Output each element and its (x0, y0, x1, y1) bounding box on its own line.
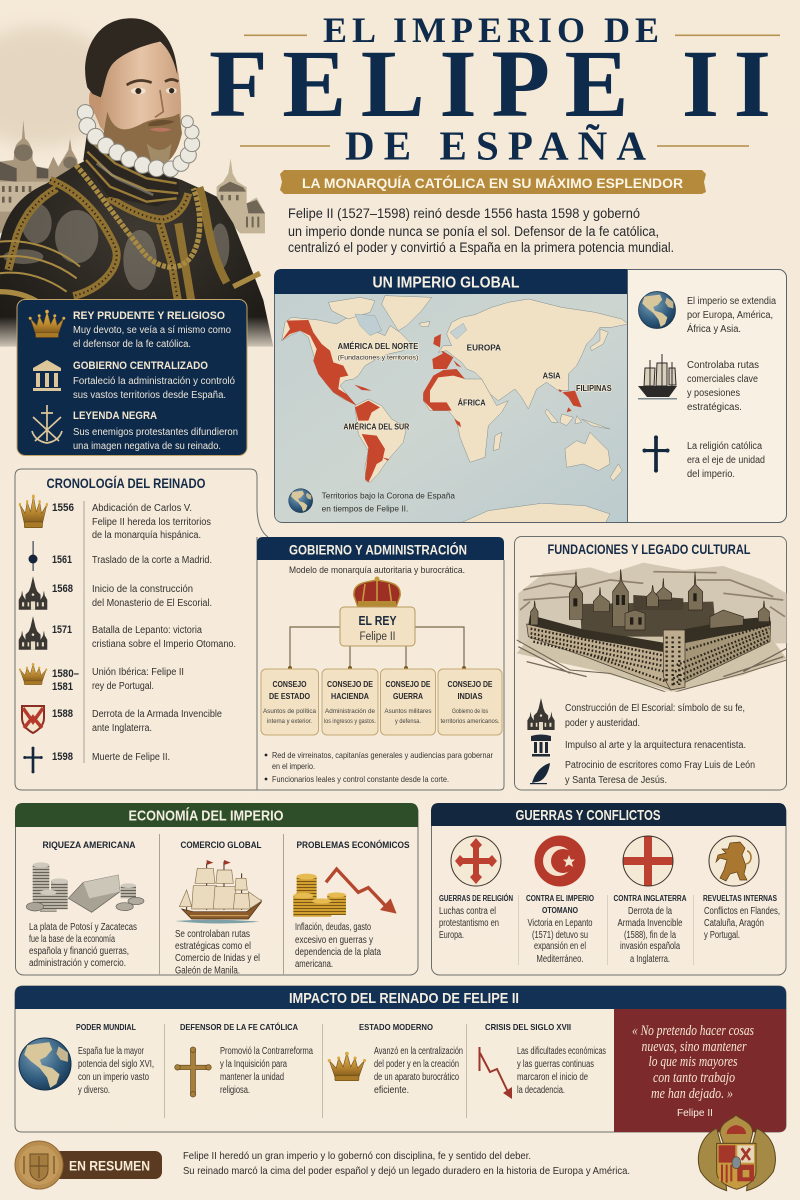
panel: cronologia del reinado: Muerte de Felipe II. (92, 752, 170, 763)
icon: column (531, 734, 551, 756)
column: riqueza americana: fue la base de la economía (29, 934, 115, 945)
column: defensor de la fe: y la Inquisición para (220, 1059, 287, 1070)
column: contra el imperio otomano: Victoria en Lepanto (528, 918, 593, 929)
subtitle ribbon: LA MONARQUÍA CATÓLICA EN SU MÁXIMO ESPLENDOR (302, 174, 683, 191)
illustration: el escorial engraving (517, 563, 787, 693)
illustration: galleon (175, 860, 262, 923)
box: consejo de indias: Gobierno de los (452, 708, 488, 715)
column: contra inglaterra (614, 894, 687, 965)
icon: shield (22, 706, 44, 733)
column: contra inglaterra: a Inglaterra. (630, 954, 670, 965)
panel: cronologia del reinado: 1580– (52, 668, 79, 680)
panel: cronologia del reinado: cristiana sobre el Imperio Otomano. (92, 639, 236, 650)
box: consejo de indias (438, 669, 502, 735)
world map (275, 294, 628, 524)
en resumen badge: EN RESUMEN (69, 1158, 150, 1174)
column: crisis del siglo xvii: la decadencia. (517, 1085, 565, 1096)
panel: rey prudente: Sus enemigos protestantes difundieron (73, 427, 238, 438)
world map: ASIA (543, 372, 561, 381)
header: economia: ECONOMÍA DEL IMPERIO (128, 808, 284, 824)
panel: un imperio global: por Europa, América, (687, 310, 773, 321)
panel: economia del imperio (15, 803, 418, 976)
panel: fundaciones y legado cultural: y Santa Teresa de Jesús. (565, 775, 667, 786)
column: problemas economicos: excesivo en guerras y (295, 935, 373, 946)
quote box: Felipe II (677, 1107, 713, 1119)
panel: cronologia del reinado: 1556 (52, 502, 74, 514)
column: defensor de la fe: mantener la unidad (220, 1072, 284, 1083)
box: consejo de guerra: Asuntos militares (384, 708, 432, 715)
panel: cronologia del reinado (15, 469, 268, 790)
column: contra inglaterra: invasión española (620, 941, 680, 952)
column: contra el imperio otomano: (1571) detuvo su (532, 930, 588, 941)
panel: cronologia del reinado: 1581 (52, 681, 73, 693)
column: comercio global: Comercio de Inidas y el (175, 953, 260, 964)
header: un imperio global (274, 269, 627, 294)
column: contra inglaterra: (1588), fin de la (624, 930, 676, 941)
world map: FILIPINAS (576, 384, 612, 393)
box: consejo de estado: interna y exterior. (267, 718, 312, 725)
panel: guerras y conflictos (431, 803, 786, 975)
illustration: silver coins and ingot (26, 862, 144, 912)
column: contra el imperio otomano (526, 894, 594, 965)
panel: rey prudente: una imagen negativa de su reinado. (73, 441, 221, 452)
panel: rey prudente: sus vastos territorios desde España. (73, 390, 226, 401)
world map: (Fundaciones y territorios) (338, 356, 418, 362)
icon: royal crown (354, 576, 400, 607)
column: riqueza americana (26, 840, 144, 969)
panel: rey prudente: Muy devoto, se veía a sí mismo como (73, 325, 231, 336)
panel: cronologia del reinado: 1561 (52, 554, 72, 566)
map legend: Territorios bajo la Corona de España (322, 491, 455, 501)
column: crisis del siglo xvii: y las guerras continuas (517, 1059, 594, 1070)
map legend: en tiempos de Felipe II. (322, 503, 408, 513)
icon: crown 1556 (19, 495, 48, 528)
world map: AMÉRICA DEL SUR (343, 422, 410, 431)
icon: cross 1598 (23, 747, 43, 773)
summary text: Felipe II heredó un gran imperio y lo gobernó con disciplina, fe y sentido del deber. (183, 1150, 531, 1162)
column: crisis del siglo xvii (480, 1022, 606, 1099)
panel: cronologia del reinado: Batalla de Lepanto: victoria (92, 625, 202, 636)
header: gobierno (257, 537, 504, 560)
title: DE ESPAÑA (345, 122, 646, 168)
map legend (289, 489, 455, 513)
panel: cronologia del reinado: 1568 (52, 583, 73, 595)
column: revueltas internas: y Portugal. (704, 930, 740, 941)
icon: anchor and crossed swords (32, 405, 62, 443)
box: el rey: EL REY (358, 614, 397, 628)
quote box: lo que mis mayores (648, 1054, 738, 1070)
column: riqueza americana: española y financió guerras, (29, 946, 129, 957)
world map: ÁFRICA (458, 398, 486, 407)
header: gobierno: GOBIERNO Y ADMINISTRACIÓN (289, 540, 467, 558)
panel: fundaciones y legado cultural: poder y austeridad. (565, 718, 640, 729)
column: revueltas internas: Conflictos en Flandes, (704, 906, 780, 917)
panel: fundaciones y legado cultural: FUNDACIONES Y LEGADO CULTURAL (548, 541, 751, 557)
panel: cronologia del reinado: 1588 (52, 708, 73, 720)
column: guerras de religion: Luchas contra el (439, 906, 496, 917)
panel: un imperio global: La religión católica (687, 441, 762, 452)
column: poder mundial: y diverso. (78, 1085, 110, 1096)
column: crisis del siglo xvii: marcaron el inicio de (517, 1072, 588, 1083)
icon: crown 1580 (19, 663, 47, 685)
column: defensor de la fe: religiosa. (220, 1085, 250, 1096)
box: consejo de indias: CONSEJO DE (448, 679, 493, 689)
column: contra inglaterra: Armada Invencible (618, 918, 683, 929)
panel: gobierno y administracion: Modelo de monarquía autoritaria y burocrática. (289, 565, 465, 576)
panel: un imperio global: del imperio. (687, 469, 735, 480)
panel: cronologia del reinado: Inicio de la construcción (92, 584, 193, 595)
column: revueltas internas: REVUELTAS INTERNAS (703, 894, 778, 903)
column: poder mundial: potencia del siglo XVI, (78, 1059, 154, 1070)
column: estado moderno: ESTADO MODERNO (359, 1022, 433, 1032)
icon: ship (638, 354, 677, 400)
column: comercio global: estratégicas como el (175, 941, 251, 952)
panel: rey prudente: GOBIERNO CENTRALIZADO (73, 360, 208, 372)
column: revueltas internas: Cataluña, Aragón (704, 918, 764, 929)
box: consejo de hacienda: los ingresos y gastos. (324, 718, 376, 725)
column: problemas economicos: PROBLEMAS ECONÓMICOS (296, 839, 410, 851)
box: consejo de hacienda: Administración de (325, 708, 375, 715)
icon: government building (33, 360, 61, 391)
column: estado moderno: del poder y en la creación (374, 1059, 459, 1070)
icon: gold cross (175, 1047, 211, 1097)
title: FELIPE II (209, 30, 771, 137)
bullet list (265, 750, 493, 784)
panel: cronologia del reinado: 1571 (52, 624, 72, 636)
icon: compass pin (28, 541, 38, 571)
coat of arms (698, 1115, 775, 1191)
box: consejo de indias: INDIAS (458, 691, 483, 701)
column: guerras de religion: Europa. (439, 930, 464, 941)
quote box: nuevas, sino mantener (642, 1039, 747, 1055)
column: guerras de religion: GUERRAS DE RELIGIÓN (439, 894, 513, 903)
column: problemas economicos: dependencia de la plata (295, 947, 381, 958)
box: consejo de estado: DE ESTADO (269, 691, 310, 701)
panel: cronologia del reinado: ante Inglaterra. (92, 723, 152, 734)
emblem: cross of religion (451, 836, 501, 886)
column: estado moderno: de un aparato burocrático (374, 1072, 459, 1083)
panel: cronologia del reinado: Felipe II hereda los territorios (92, 517, 211, 528)
column: contra el imperio otomano: Mediterráneo. (536, 954, 584, 965)
box: consejo de hacienda: HACIENDA (331, 691, 369, 701)
intro paragraph: Felipe II (1527–1598) reinó desde 1556 hasta 1598 y gobernó (288, 206, 640, 221)
column: problemas economicos (293, 839, 410, 970)
panel: cronologia del reinado: de la monarquía hispánica. (92, 530, 201, 541)
panel: fundaciones y legado cultural: Patrocinio de escritores como Fray Luis de León (565, 760, 755, 771)
column: riqueza americana: administración y comercio. (29, 958, 126, 969)
panel: gobierno y administracion (257, 537, 504, 790)
panel: cronologia del reinado: rey de Portugal. (92, 681, 154, 692)
panel: un imperio global: era el eje de unidad (687, 455, 765, 466)
column: revueltas internas (703, 894, 780, 941)
column: contra inglaterra: Derrota de la (628, 906, 672, 917)
header: guerras (431, 803, 786, 826)
icon: lepanto tower (19, 616, 47, 650)
panel: un imperio global: Controlaba rutas (687, 360, 759, 371)
column: comercio global: Galeón de Manila. (175, 966, 240, 976)
box: consejo de guerra: GUERRA (393, 691, 423, 701)
column: defensor de la fe (175, 1021, 313, 1097)
quote box (614, 1009, 786, 1132)
column: estado moderno: eficiente. (374, 1085, 409, 1096)
header: impacto: IMPACTO DEL REINADO DE FELIPE II (289, 990, 519, 1007)
panel: un imperio global: estratégicas. (687, 402, 742, 413)
panel: rey prudente: el defensor de la fe católica. (73, 339, 191, 350)
intro paragraph (288, 206, 674, 255)
box: el rey (340, 607, 415, 646)
portrait: Felipe II with armour and palace backdrop (0, 18, 277, 353)
column: contra el imperio otomano: OTOMANO (542, 906, 578, 915)
panel: un imperio global: comerciales clave (687, 374, 758, 385)
header: impacto (15, 986, 786, 1009)
column: guerras de religion (439, 894, 513, 941)
box: consejo de guerra: CONSEJO DE (386, 679, 431, 689)
world map: AMÉRICA DEL NORTE (338, 342, 419, 351)
connectors (290, 627, 464, 668)
panel: cronologia del reinado: Derrota de la Armada Invencible (92, 709, 222, 720)
panel: cronologia del reinado: del Monasterio de El Escorial. (92, 598, 212, 609)
column: contra el imperio otomano: CONTRA EL IMPERIO (526, 894, 594, 903)
panel: fundaciones y legado cultural (514, 536, 787, 790)
panel: fundaciones y legado cultural: Construcción de El Escorial: símbolo de su fe, (565, 703, 745, 714)
panel: rey prudente: LEYENDA NEGRA (73, 410, 157, 422)
panel: cronologia del reinado: CRONOLOGÍA DEL REINADO (46, 475, 206, 491)
column: contra el imperio otomano: expansión en el (534, 941, 586, 952)
title: EL IMPERIO DE (323, 10, 659, 50)
summary text: Su reinado marcó la cima del poder español y dejó un legado duradero en la historia de Europa y América. (183, 1165, 630, 1177)
icon: falling arrow (480, 1047, 512, 1099)
column: poder mundial: con un imperio vasto (78, 1072, 149, 1083)
box: consejo de estado: Asuntos de política (263, 708, 316, 715)
column: estado moderno (328, 1022, 463, 1096)
box: el rey: Felipe II (360, 631, 396, 643)
world map: EUROPA (467, 344, 501, 353)
column: crisis del siglo xvii: CRISIS DEL SIGLO XVII (485, 1022, 571, 1032)
summary text (183, 1150, 630, 1177)
icon: large globe (19, 1038, 71, 1090)
intro paragraph: centralizó el poder y convirtió a España en la primera potencia mundial. (288, 240, 674, 255)
header: un imperio global: UN IMPERIO GLOBAL (372, 274, 520, 292)
panel: rey prudente (17, 300, 247, 456)
en resumen badge (15, 1141, 162, 1189)
icon: globe (638, 292, 676, 328)
column: estado moderno: Avanzó en la centralización (374, 1046, 463, 1057)
column: comercio global: COMERCIO GLOBAL (180, 840, 262, 851)
header: economia (15, 803, 418, 827)
column: guerras de religion: protestantismo en (439, 918, 499, 929)
illustration: gold coins and falling arrow (293, 869, 397, 917)
box: consejo de guerra: y defensa. (395, 718, 421, 725)
panel: impacto del reinado (15, 986, 786, 1132)
quote box: « No pretendo hacer cosas (632, 1023, 754, 1039)
column: defensor de la fe: DEFENSOR DE LA FE CATÓLICA (180, 1021, 298, 1032)
icon: escorial (527, 698, 555, 730)
column: poder mundial (19, 1022, 154, 1096)
header: guerras: GUERRAS Y CONFLICTOS (516, 807, 660, 824)
palace backdrop and armour, drawn in crop space (0, 120, 273, 347)
bullet list: Funcionarios leales y control constante desde la corte. (272, 774, 449, 784)
quote box: con tanto trabajo (653, 1070, 735, 1086)
quote box: me han dejado. » (651, 1086, 733, 1102)
panel: un imperio global: y posesiones (687, 388, 740, 399)
column: crisis del siglo xvii: Las dificultades económicas (517, 1046, 606, 1057)
panel: cronologia del reinado: Abdicación de Carlos V. (92, 503, 192, 514)
bullet list: en el imperio. (272, 761, 315, 771)
face, in head space (0, 18, 277, 353)
icon: cross (642, 435, 670, 473)
panel: un imperio global: El imperio se extendia (687, 296, 776, 307)
column: problemas economicos: Inflación, deudas, gasto (295, 922, 371, 933)
column: comercio global (175, 840, 262, 976)
column: riqueza americana: RIQUEZA AMERICANA (42, 840, 136, 851)
box: consejo de hacienda: CONSEJO DE (327, 679, 373, 689)
panel: un imperio global: África y Asia. (687, 322, 741, 335)
bullet list: Red de virreinatos, capitanías generales y audiencias para gobernar (272, 750, 493, 760)
emblem: cross of saint george (623, 836, 673, 886)
icon: monastery (19, 576, 47, 610)
panel: cronologia del reinado: Traslado de la corte a Madrid. (92, 555, 212, 566)
icon: crown (29, 310, 65, 337)
column: riqueza americana: La plata de Potosí y Zacatecas (29, 922, 137, 933)
box: consejo de hacienda (322, 669, 378, 735)
panel: rey prudente: Fortaleció la administración y controló (73, 376, 235, 387)
panel: rey prudente: REY PRUDENTE Y RELIGIOSO (73, 310, 225, 322)
column: poder mundial: España fue la mayor (78, 1046, 144, 1057)
box: consejo de guerra (380, 669, 436, 735)
subtitle ribbon (280, 170, 706, 194)
emblem: lion (709, 836, 759, 886)
panel: cronologia del reinado: 1598 (52, 751, 73, 763)
icon: gold crown (328, 1052, 366, 1081)
emblem: crescent and star (534, 836, 586, 886)
column: defensor de la fe: Promovió la Contrarreforma (220, 1046, 313, 1057)
box: consejo de estado (261, 669, 318, 735)
panel: fundaciones y legado cultural: Impulso al arte y la arquitectura renacentista. (565, 740, 746, 751)
icon: quill (530, 763, 550, 784)
column: problemas economicos: americana. (295, 959, 333, 970)
column: comercio global: Se controlaban rutas (175, 929, 250, 940)
column: contra inglaterra: CONTRA INGLATERRA (614, 894, 687, 903)
title (209, 10, 780, 168)
box: consejo de indias: territorios americanos. (440, 718, 500, 725)
column: poder mundial: PODER MUNDIAL (76, 1022, 136, 1032)
box: consejo de estado: CONSEJO (272, 679, 307, 689)
panel: cronologia del reinado: Unión Ibérica: Felipe II (92, 667, 184, 678)
intro paragraph: un imperio donde nunca se ponía el sol. Defensor de la fe católica, (288, 224, 659, 239)
panel: un imperio global (274, 269, 786, 524)
